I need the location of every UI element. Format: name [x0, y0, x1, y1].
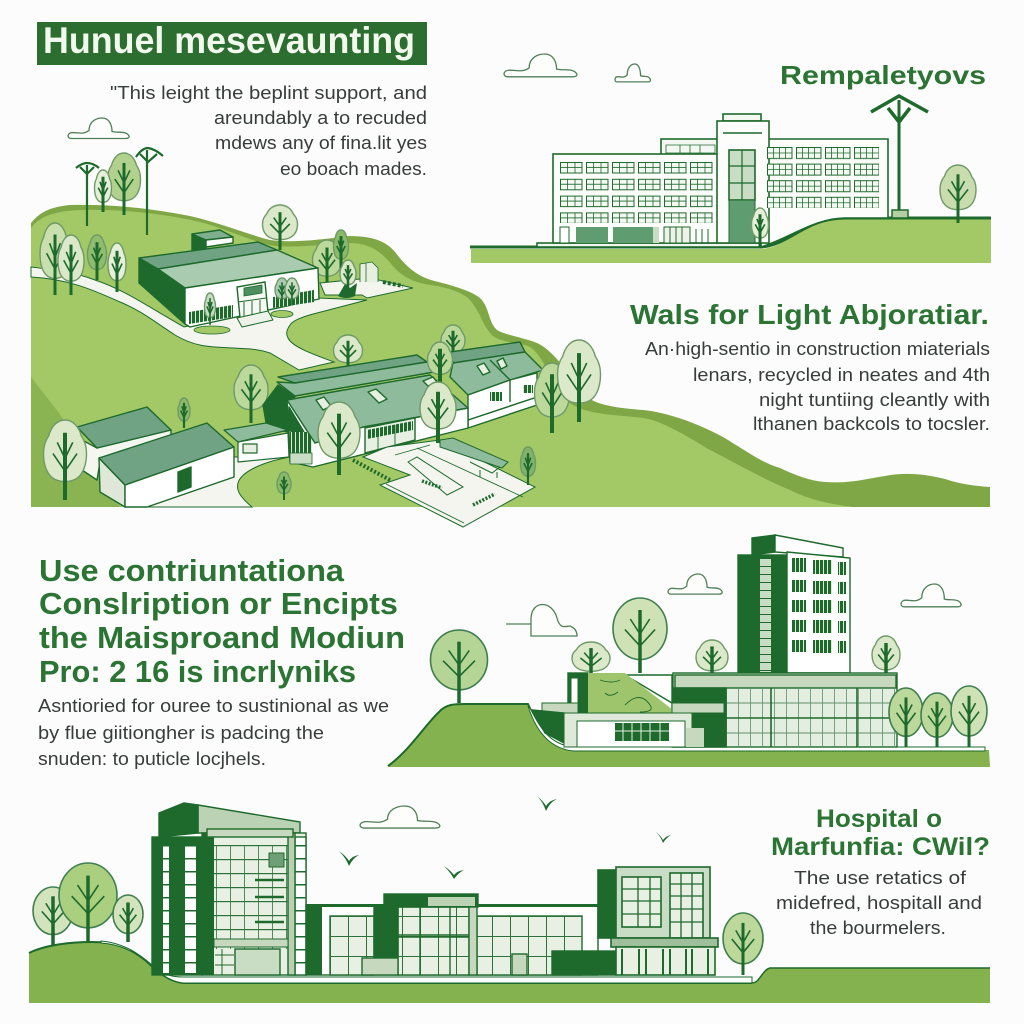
text block: materials: lthanen backcols to tocsler. [753, 414, 990, 434]
tall building [152, 803, 306, 975]
text block: materials [645, 339, 990, 434]
text block: construction: snuden: to puticle locjhels. [38, 749, 266, 769]
trees left [33, 863, 143, 945]
lamp mast [871, 96, 928, 218]
panel: bottom hospital illustration [29, 796, 990, 1003]
text block: hospital: midefred, hospitall and [776, 893, 982, 913]
clouds [504, 54, 650, 82]
front trees of hall [204, 278, 299, 325]
foreground trees [889, 686, 987, 747]
panel: middle hospital illustration [388, 535, 990, 767]
text block: construction: Asntioried for ouree to sustinional as we [38, 696, 389, 716]
cloud [360, 806, 440, 828]
title banner: Hunuel mesevaunting [43, 20, 415, 61]
heading: construction: the Maisproand Modiun [39, 620, 405, 655]
cloud [68, 118, 129, 139]
building: back shed [77, 407, 171, 480]
winding road [31, 267, 367, 370]
background trees [430, 598, 900, 703]
panel: top right hospital illustration [470, 54, 991, 263]
ground [29, 941, 990, 1003]
low podium building [532, 673, 897, 747]
background trees on hill [40, 205, 465, 423]
heading: hospital: Marfunfia: CWil? [771, 833, 990, 861]
birds [339, 796, 671, 879]
heading: hospital [771, 805, 990, 861]
text block: construction: by flue giitiongher is padcing the [38, 723, 324, 743]
text block: hospital: The use retatics of [794, 868, 967, 888]
heading: construction: Use contriuntationa [39, 553, 345, 588]
building: connector [224, 423, 289, 462]
terrace beside hall [320, 262, 413, 298]
heading: construction [39, 553, 405, 689]
text block: hospital [776, 868, 982, 938]
intro text block: areundably a to recuded [214, 108, 427, 128]
terrace tree and shrub [338, 260, 357, 298]
lower road [147, 457, 290, 507]
text block: construction [38, 696, 389, 769]
hill landscape [31, 205, 990, 507]
intro text block: mdews any of fina.lit yes [215, 133, 427, 153]
building: main long house [263, 355, 468, 467]
foreground trees [44, 340, 600, 500]
top tree group with palms [76, 148, 163, 235]
right block [598, 867, 718, 975]
ground [470, 218, 991, 263]
intro text block: "This leight the beplint support, and [110, 83, 427, 103]
clouds [506, 574, 961, 636]
intro text block [110, 83, 427, 179]
panel: hillside campus illustration [31, 118, 990, 527]
text block: materials: An·high-sentio in construction miaterials [645, 339, 990, 359]
building: upper campus hall [139, 230, 319, 334]
heading: hospital: Hospital o [816, 805, 942, 833]
text block: hospital: the bourmelers. [810, 918, 946, 938]
text block: materials: lenars, recycled in neates and 4th [693, 365, 990, 385]
heading: right top: Rempaletyovs [780, 60, 986, 90]
middle wing [306, 894, 616, 975]
building: front shed [99, 423, 234, 507]
trees [752, 165, 976, 247]
tree right [723, 913, 763, 975]
plaza with canopy [353, 438, 535, 527]
hill and ground [388, 704, 990, 767]
heading: construction: Pro: 2 16 is incrlyniks [39, 654, 356, 689]
building: right wing [450, 342, 543, 428]
heading: materials: Wals for Light Abjoratiar. [630, 299, 989, 330]
text block: materials: night tuntiing cleantly with [759, 390, 990, 410]
building [537, 114, 888, 247]
tall tower [738, 535, 850, 673]
intro text block: eo boach mades. [280, 159, 427, 179]
heading: construction: Conslription or Encipts [39, 586, 398, 621]
